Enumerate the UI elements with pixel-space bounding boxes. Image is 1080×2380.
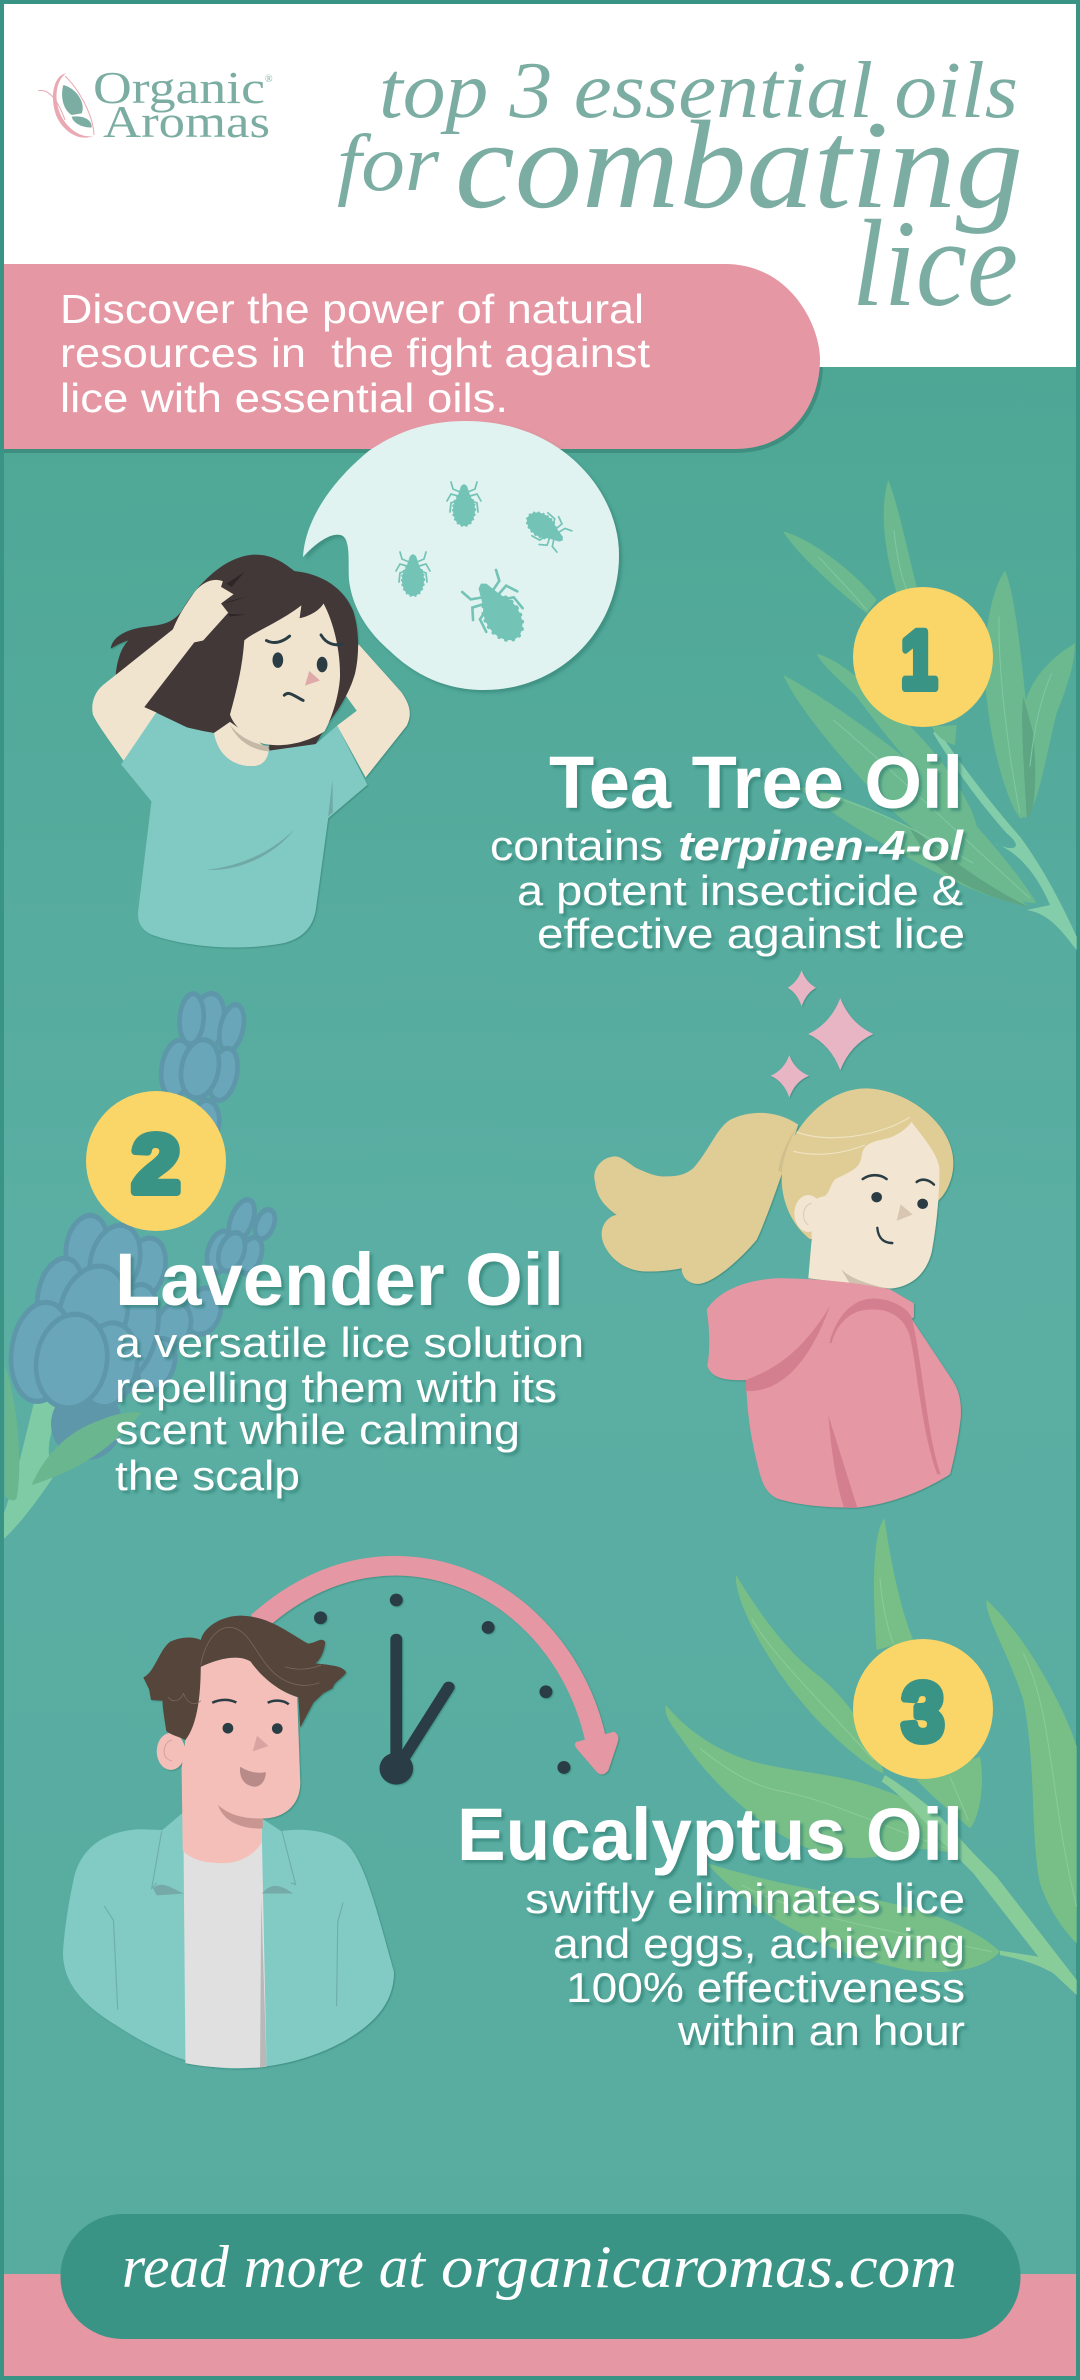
tea tree oil text: a potent insecticide & bbox=[517, 867, 963, 914]
clock dots bbox=[314, 1594, 570, 1774]
title: top 3 essential oils bbox=[379, 47, 1018, 135]
eucalyptus oil text: swiftly eliminates lice bbox=[525, 1875, 965, 1922]
logo bbox=[38, 62, 273, 147]
character: man bbox=[63, 1616, 394, 2069]
tea tree oil text bbox=[490, 741, 965, 957]
hair bbox=[143, 1616, 346, 1740]
hoodie bbox=[707, 1278, 961, 1508]
badge 2: 2 bbox=[132, 1119, 180, 1210]
intro text: resources in the fight against bbox=[60, 330, 651, 376]
eucalyptus oil text: Eucalyptus Oil bbox=[457, 1793, 963, 1876]
title: combating bbox=[455, 96, 1023, 235]
character: girl scratching head bbox=[92, 555, 410, 947]
logo: Aromas bbox=[103, 96, 270, 147]
badge 3 bbox=[853, 1639, 993, 1779]
badge 3: 3 bbox=[902, 1667, 944, 1758]
tea tree leaves bbox=[783, 480, 1077, 950]
eucalyptus oil text bbox=[457, 1793, 965, 2054]
lavender oil text: the scalp bbox=[115, 1452, 300, 1499]
title bbox=[337, 47, 1023, 332]
badge 1 bbox=[853, 587, 993, 727]
sprig stem bbox=[4, 1393, 63, 1539]
title: for bbox=[337, 120, 440, 208]
lavender oil text bbox=[115, 1238, 584, 1499]
tea tree oil text: contains bbox=[490, 822, 663, 869]
badge 1: 1 bbox=[901, 615, 937, 706]
ponytail bbox=[594, 1113, 798, 1284]
call to action pill bbox=[60, 2214, 1020, 2339]
head bbox=[782, 1088, 953, 1239]
clock bbox=[258, 1566, 618, 1785]
tea tree oil text: Tea Tree Oil bbox=[549, 741, 963, 824]
logo wordmark: Organic bbox=[93, 62, 265, 113]
call to action text bbox=[122, 2234, 957, 2300]
banner shadow bbox=[4, 268, 823, 453]
features bbox=[223, 1723, 233, 1734]
clock arrow bbox=[258, 1566, 596, 1740]
intro text bbox=[60, 286, 651, 421]
lavender oil text: a versatile lice solution bbox=[115, 1319, 584, 1366]
t-shirt bbox=[184, 1842, 267, 2068]
clock hands bbox=[396, 1639, 449, 1769]
lice bbox=[396, 482, 574, 653]
teal background panel bbox=[4, 367, 1076, 2275]
eucalyptus oil text: and eggs, achieving bbox=[553, 1920, 965, 1967]
call to action text: organicaromas.com bbox=[441, 2234, 957, 2300]
logo: ® bbox=[265, 74, 273, 85]
eucalyptus oil text: 100% effectiveness bbox=[566, 1964, 965, 2011]
lavender leaves bbox=[5, 1365, 142, 1500]
lavender oil text: repelling them with its bbox=[115, 1364, 557, 1411]
speech bubble with lice bbox=[303, 421, 619, 690]
eucalyptus leaves bbox=[665, 1518, 1077, 1995]
pink footer band bbox=[4, 2274, 1076, 2376]
call to action text: read more at bbox=[122, 2234, 426, 2300]
tea tree oil text: terpinen-4-ol bbox=[678, 822, 964, 869]
logo butterfly icon bbox=[38, 73, 94, 138]
sparkles bbox=[771, 970, 873, 1098]
intro banner bbox=[4, 264, 820, 449]
lavender sprigs bbox=[4, 989, 279, 1539]
white header panel bbox=[4, 4, 1076, 367]
face and neck bbox=[182, 1658, 300, 1863]
eucalyptus oil text: within an hour bbox=[677, 2007, 965, 2054]
tea tree oil text: effective against lice bbox=[537, 910, 965, 957]
lavender oil text: Lavender Oil bbox=[115, 1238, 564, 1321]
lavender buds bbox=[4, 989, 279, 1457]
character: girl with ponytail bbox=[594, 1088, 961, 1508]
lavender oil text: scent while calming bbox=[115, 1406, 520, 1453]
title: lice bbox=[852, 195, 1018, 332]
intro text: Discover the power of natural bbox=[60, 286, 644, 332]
badge 2 bbox=[86, 1091, 226, 1231]
jacket bbox=[63, 1812, 394, 2069]
intro text: lice with essential oils. bbox=[60, 375, 508, 421]
